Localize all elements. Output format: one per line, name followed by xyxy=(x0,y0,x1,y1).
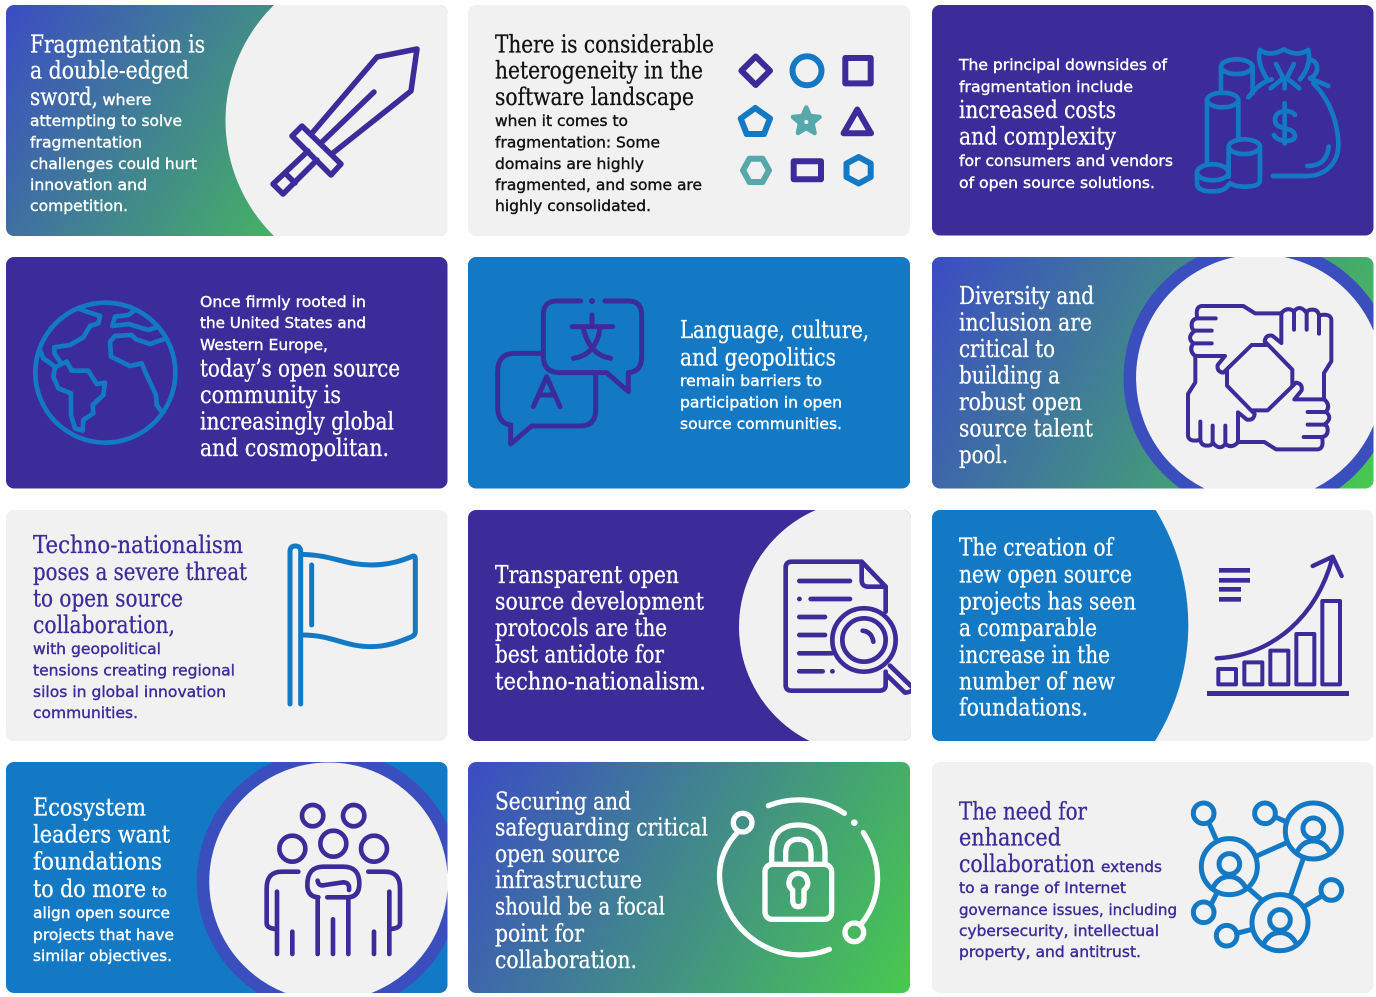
icon: document with magnifying glass xyxy=(786,562,913,693)
text: enhanced collaboration: governance issues, including xyxy=(959,901,1177,919)
text: today's community is global xyxy=(200,293,400,462)
icon: flag xyxy=(290,546,415,704)
text: new open source projects: a comparable xyxy=(959,614,1097,642)
text: ecosystem leaders: to do more xyxy=(33,875,146,903)
text: new open source projects: foundations. xyxy=(959,694,1088,722)
text: fragmentation is a double-edged sword: attempting to solve xyxy=(30,112,182,130)
text: ecosystem leaders: to xyxy=(152,883,167,901)
panel: techno-nationalism threat xyxy=(6,510,448,741)
text: transparent protocols: source development xyxy=(495,588,704,616)
text: language barriers xyxy=(680,316,869,433)
text: language barriers: participation in open xyxy=(680,394,842,412)
panel: ecosystem leaders xyxy=(6,756,454,997)
text: securing infrastructure: safeguarding critical xyxy=(495,814,708,842)
text: securing infrastructure xyxy=(495,788,708,974)
text: enhanced collaboration: property, and antitrust. xyxy=(959,943,1141,961)
icon: globe xyxy=(35,303,175,443)
text: today's community is global: the United States and xyxy=(200,314,366,332)
icon: money bag and coins xyxy=(1197,49,1338,191)
text: ecosystem leaders: Ecosystem xyxy=(33,794,146,822)
text: transparent protocols: Transparent open xyxy=(495,561,679,589)
text: diversity and inclusion: robust open xyxy=(959,388,1082,416)
text: fragmentation is a double-edged sword: sword, xyxy=(30,83,98,111)
text: ecosystem leaders: foundations xyxy=(33,848,162,876)
icon: group of people xyxy=(267,805,400,954)
text: diversity and inclusion: inclusion are xyxy=(959,308,1092,336)
text: ecosystem leaders: projects that have xyxy=(33,926,174,944)
text: increased costs and complexity: and complexity xyxy=(959,122,1116,150)
text: increased costs and complexity: The principal downsides of xyxy=(958,56,1168,74)
text: heterogeneity: when it comes to xyxy=(495,112,628,130)
text: fragmentation is a double-edged sword: fragmentation xyxy=(30,134,142,152)
text: heterogeneity: fragmented, and some are xyxy=(495,176,702,194)
text: fragmentation is a double-edged sword: where xyxy=(102,91,152,109)
text: diversity and inclusion: critical to xyxy=(959,335,1055,363)
text: heterogeneity: fragmentation: Some xyxy=(495,134,660,152)
text: enhanced collaboration xyxy=(959,798,1177,961)
text: securing infrastructure: open source xyxy=(495,840,620,868)
text: techno-nationalism: silos in global innovation xyxy=(33,683,226,701)
text: diversity and inclusion: pool. xyxy=(959,441,1008,469)
text: today's community is global: community is xyxy=(200,381,341,409)
text: heterogeneity: highly consolidated. xyxy=(495,197,651,215)
panel: enhanced collaboration xyxy=(932,762,1374,993)
text: heterogeneity: There is considerable xyxy=(495,30,714,58)
text: enhanced collaboration: extends xyxy=(1101,858,1162,876)
text: today's community is global: increasingly global xyxy=(200,408,394,436)
icon: rising bar chart with arrow xyxy=(1207,557,1349,696)
text: today's community is global: Once firmly rooted in xyxy=(200,293,366,311)
icon: translation speech bubbles xyxy=(498,298,642,444)
text: ecosystem leaders xyxy=(33,794,174,965)
text: techno-nationalism: with geopolitical xyxy=(33,640,161,658)
icon: padlock with orbit xyxy=(720,800,878,955)
text: heterogeneity: domains are highly xyxy=(495,155,644,173)
text: techno-nationalism xyxy=(33,531,247,722)
panel: heterogeneity in the software landscape xyxy=(468,5,910,236)
text: new open source projects: increase in the xyxy=(959,641,1110,669)
text: today's community is global: and cosmopolitan. xyxy=(200,434,389,462)
text: increased costs and complexity: of open source solutions. xyxy=(959,174,1155,192)
text: heterogeneity xyxy=(495,30,714,215)
text: increased costs and complexity: increased costs xyxy=(959,96,1116,124)
text: today's community is global: Western Europe, xyxy=(200,336,328,354)
panel: diversity and inclusion xyxy=(932,257,1374,488)
panel: language, culture and geopolitics xyxy=(468,257,910,488)
text: language barriers: source communities. xyxy=(680,415,842,433)
text: transparent protocols: protocols are the xyxy=(495,614,667,642)
icon: sword xyxy=(273,49,417,194)
panel: downsides of fragmentation xyxy=(932,5,1374,236)
text: fragmentation is a double-edged sword: Fragmentation is xyxy=(30,30,205,58)
text: new open source projects: The creation of xyxy=(959,534,1115,562)
text: diversity and inclusion: building a xyxy=(959,362,1060,390)
text: language barriers: Language, culture, xyxy=(680,316,869,344)
text: increased costs and complexity: fragmentation include xyxy=(959,78,1133,96)
text: fragmentation is a double-edged sword xyxy=(30,30,205,215)
panel: global open source community xyxy=(6,257,448,488)
text: today's community is global: today’s open source xyxy=(200,354,400,382)
text: fragmentation is a double-edged sword: innovation and xyxy=(30,176,147,194)
panel: transparent development protocols xyxy=(468,510,911,741)
text: techno-nationalism: communities. xyxy=(33,704,138,722)
text: new open source projects xyxy=(959,534,1136,722)
text: ecosystem leaders: align open source xyxy=(33,904,170,922)
text: fragmentation is a double-edged sword: competition. xyxy=(30,197,128,215)
text: heterogeneity: software landscape xyxy=(495,83,694,111)
text: fragmentation is a double-edged sword: challenges could hurt xyxy=(30,155,197,173)
text: transparent protocols: best antidote for xyxy=(495,640,664,668)
text: increased costs and complexity: for consumers and vendors xyxy=(959,152,1173,170)
text: transparent protocols xyxy=(495,561,706,696)
text: enhanced collaboration: The need for xyxy=(959,798,1087,826)
panel: securing critical infrastructure xyxy=(468,762,910,993)
text: techno-nationalism: to open source xyxy=(33,584,183,612)
text: securing infrastructure: infrastructure xyxy=(495,866,642,894)
text: enhanced collaboration: enhanced xyxy=(959,824,1061,852)
text: techno-nationalism: Techno-nationalism xyxy=(33,531,243,559)
text: ecosystem leaders: similar objectives. xyxy=(33,947,172,965)
text: enhanced collaboration: cybersecurity, intellectual xyxy=(959,922,1159,940)
text: techno-nationalism: poses a severe threat xyxy=(33,558,247,586)
text: diversity and inclusion: source talent xyxy=(959,414,1093,442)
text: transparent protocols: techno-nationalism. xyxy=(495,668,706,696)
text: new open source projects: new open source xyxy=(959,560,1132,588)
text: language barriers: remain barriers to xyxy=(680,372,822,390)
text: securing infrastructure: collaboration. xyxy=(495,946,637,974)
text: heterogeneity: heterogeneity in the xyxy=(495,56,703,84)
text: enhanced collaboration: to a range of Internet xyxy=(959,879,1126,897)
text: enhanced collaboration: collaboration xyxy=(959,850,1095,878)
text: techno-nationalism: collaboration, xyxy=(33,611,175,639)
text: diversity and inclusion xyxy=(959,282,1094,469)
text: securing infrastructure: should be a focal xyxy=(495,892,665,920)
panel: new foundations increase xyxy=(932,510,1374,741)
text: language barriers: and geopolitics xyxy=(680,344,836,372)
icon: people network xyxy=(1193,803,1342,951)
text: increased costs and complexity xyxy=(958,56,1173,192)
text: fragmentation is a double-edged sword: a double-edged xyxy=(30,56,189,84)
text: new open source projects: projects has seen xyxy=(959,588,1136,616)
text: securing infrastructure: Securing and xyxy=(495,788,631,816)
text: techno-nationalism: tensions creating regional xyxy=(33,662,235,680)
text: new open source projects: number of new xyxy=(959,668,1115,696)
panel: double-edged sword xyxy=(6,5,448,236)
icon: grid of nine shapes xyxy=(741,56,871,184)
text: securing infrastructure: point for xyxy=(495,920,584,948)
text: ecosystem leaders: leaders want xyxy=(33,820,170,848)
text: diversity and inclusion: Diversity and xyxy=(959,282,1094,310)
icon: four interlocked hands xyxy=(1188,306,1331,449)
